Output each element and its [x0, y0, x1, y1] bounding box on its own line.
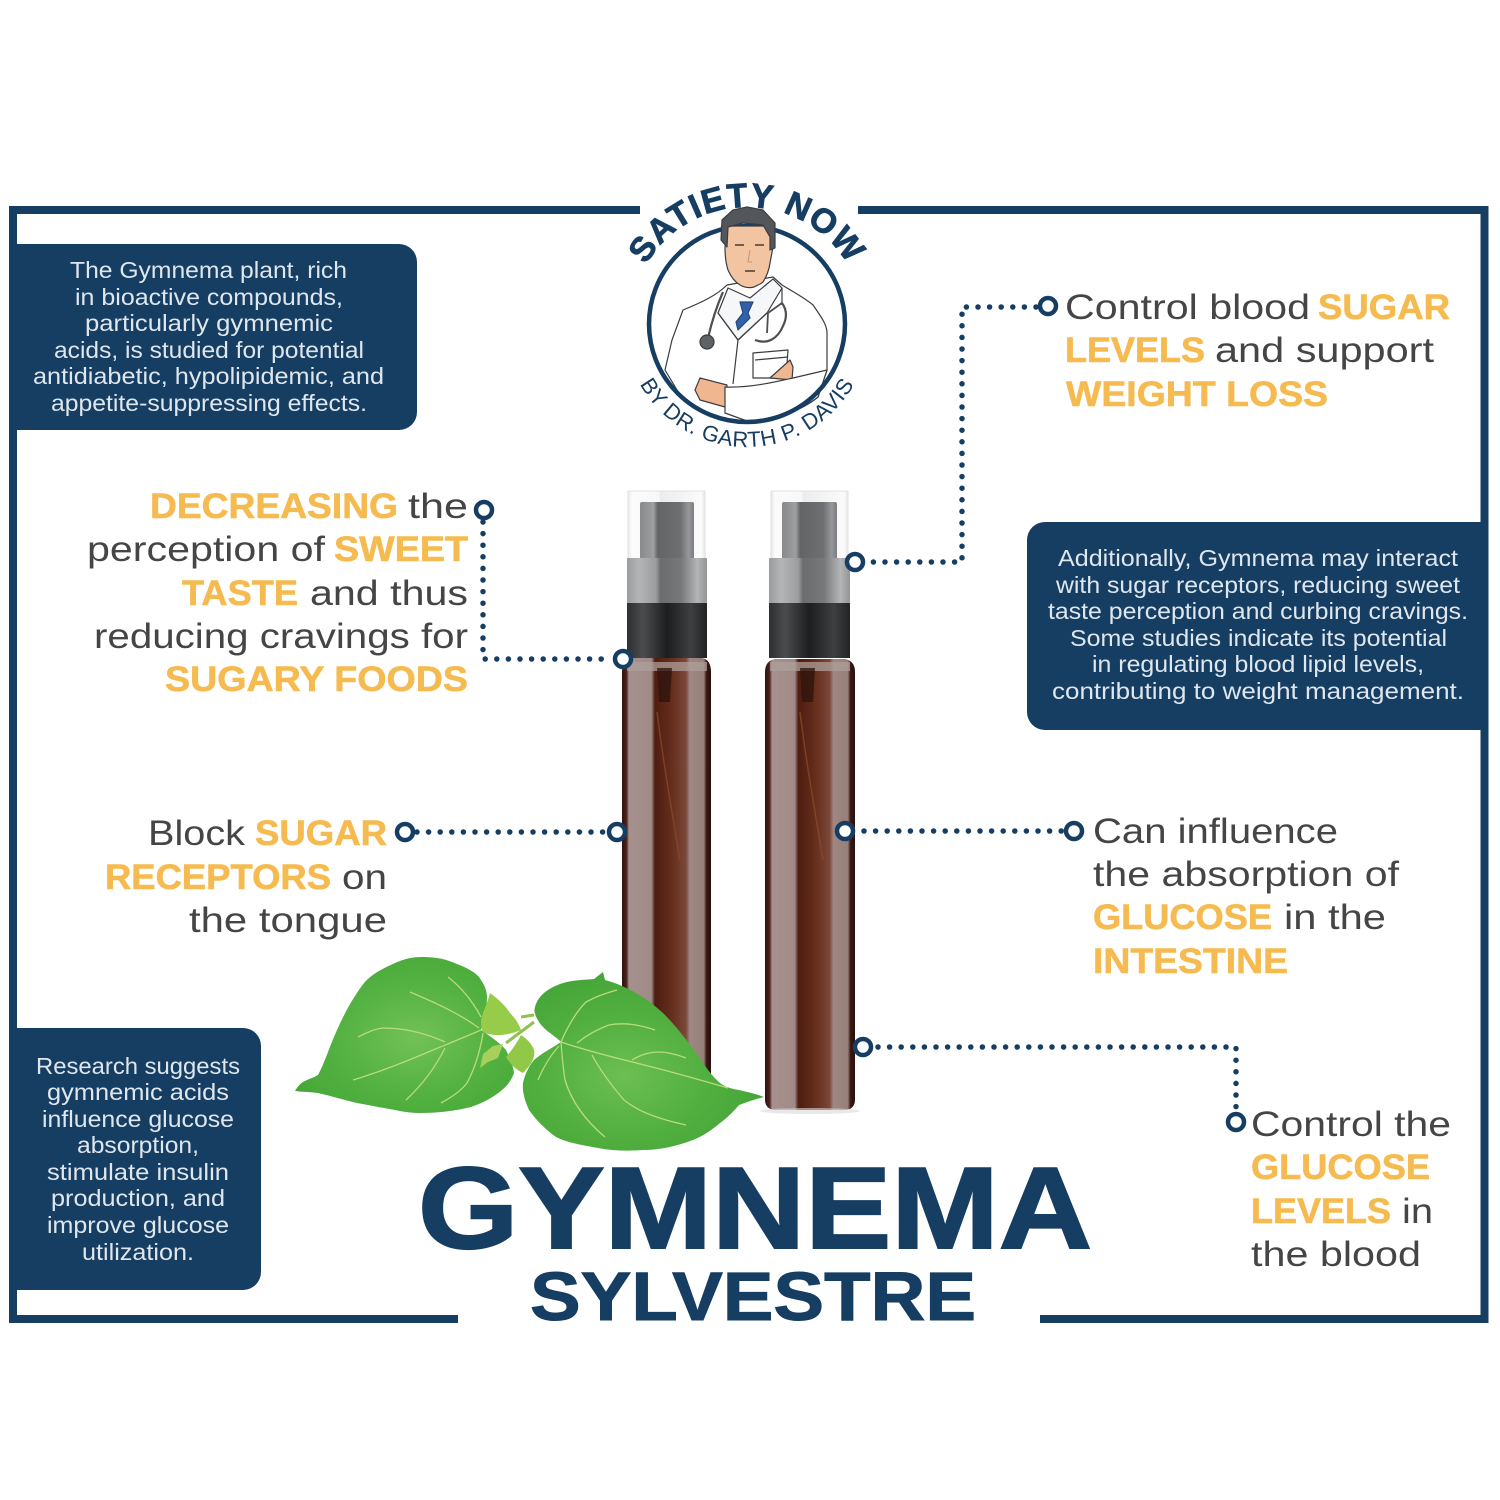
callout: blood glucose: in: [1402, 1192, 1433, 1231]
logo heading: Satiety Now: SATIETY NOW: [630, 182, 868, 262]
logo byline: BY DR. GARTH P. DAVIS: [640, 378, 852, 448]
panel: sugar receptors and lipid levels: Some studies indicate its potential: [1070, 625, 1447, 651]
icon: doctor head: [721, 207, 775, 288]
panel: Gymnema plant compounds: in bioactive compounds,: [75, 284, 343, 310]
title: [418, 1143, 1092, 1335]
panel: research on glucose: gymnemic acids: [47, 1079, 229, 1105]
panel: research on glucose: utilization.: [82, 1239, 194, 1265]
connector: sugar receptors: [397, 824, 625, 840]
title line: Gymnema: GYMNEMA: [418, 1143, 1092, 1273]
callout: sweet taste: the: [408, 487, 468, 526]
logo ring: [649, 226, 845, 422]
callout: glucose intestine: the absorption of: [1093, 855, 1399, 894]
panel: sugar receptors and lipid levels: in regulating blood lipid levels,: [1092, 651, 1424, 677]
logo: Satiety Now badge: [630, 182, 868, 448]
panel: sugar receptors and lipid levels: with sugar receptors, reducing sweet: [1055, 572, 1461, 598]
callout: glucose intestine: Can influence: [1093, 812, 1338, 851]
frame border: [13, 210, 1484, 1319]
callout: sugar receptors: the tongue: [189, 901, 387, 940]
panel: research on glucose: production, and: [51, 1185, 225, 1211]
connector: blood glucose: [855, 1039, 1244, 1130]
panel: sugar receptors and lipid levels: [1027, 522, 1482, 730]
callout: sugar levels: [1065, 288, 1450, 414]
callout: glucose intestine: [1093, 812, 1399, 981]
callout: sugar levels: and support: [1215, 331, 1434, 370]
callout: glucose intestine: in the: [1284, 898, 1386, 937]
callout: sweet taste: perception of: [87, 530, 325, 569]
callout: sweet taste: and thus: [310, 574, 468, 613]
panel: research on glucose: [15, 1028, 261, 1290]
panel: Gymnema plant compounds: [15, 244, 417, 430]
connector: glucose intestine: [837, 823, 1082, 839]
connector: sugar levels: [847, 298, 1056, 570]
callout: blood glucose: Control the: [1251, 1105, 1451, 1144]
panel: Gymnema plant compounds: appetite-suppressing effects.: [51, 390, 367, 416]
panel: research on glucose: influence glucose: [42, 1106, 234, 1132]
panel: sugar receptors and lipid levels: contributing to weight management.: [1052, 678, 1464, 704]
panel: research on glucose: Research suggests: [36, 1053, 240, 1079]
icon: doctor coat: [665, 277, 827, 422]
callout: glucose intestine: INTESTINE: [1093, 942, 1288, 981]
panel: sugar receptors and lipid levels: Additionally, Gymnema may interact: [1058, 545, 1459, 571]
callout: sugar levels: Control blood: [1065, 288, 1310, 327]
callout: glucose intestine: GLUCOSE: [1093, 898, 1272, 937]
callout: sweet taste: TASTE: [182, 574, 298, 613]
panel: research on glucose: stimulate insulin: [47, 1159, 229, 1185]
panel: Gymnema plant compounds: particularly gymnemic: [85, 310, 333, 336]
panel: Gymnema plant compounds: antidiabetic, hypolipidemic, and: [33, 363, 384, 389]
connector: sweet taste: [476, 502, 631, 667]
bottle left: [622, 491, 711, 1100]
callout: blood glucose: GLUCOSE: [1251, 1148, 1430, 1187]
title line: Sylvestre: SYLVESTRE: [530, 1258, 976, 1335]
callout: sugar receptors: SUGAR: [255, 814, 387, 853]
callout: sweet taste: DECREASING: [150, 487, 398, 526]
callout: blood glucose: LEVELS: [1251, 1192, 1391, 1231]
bottle right: [760, 491, 860, 1114]
callout: blood glucose: [1251, 1105, 1451, 1274]
callout: sugar levels: SUGAR: [1318, 288, 1450, 327]
callout: blood glucose: the blood: [1251, 1235, 1421, 1274]
icon: gymnema leaves: [295, 957, 764, 1151]
panel: sugar receptors and lipid levels: taste perception and curbing cravings.: [1048, 598, 1468, 624]
panel: Gymnema plant compounds: acids, is studied for potential: [54, 337, 364, 363]
callout: sugar receptors: [105, 814, 387, 940]
callout: sugar receptors: Block: [148, 814, 246, 853]
callout: sugar levels: WEIGHT LOSS: [1066, 375, 1328, 414]
panel: Gymnema plant compounds: The Gymnema plant, rich: [70, 257, 347, 283]
callout: sweet taste: [87, 487, 468, 699]
callout: sweet taste: SWEET: [334, 530, 468, 569]
panel: research on glucose: absorption,: [77, 1132, 199, 1158]
callout: sugar receptors: RECEPTORS: [105, 858, 331, 897]
callout: sugar levels: LEVELS: [1065, 331, 1205, 370]
panel: research on glucose: improve glucose: [47, 1212, 229, 1238]
callout: sweet taste: SUGARY FOODS: [165, 660, 468, 699]
callout: sugar receptors: on: [342, 858, 387, 897]
callout: sweet taste: reducing cravings for: [94, 617, 468, 656]
